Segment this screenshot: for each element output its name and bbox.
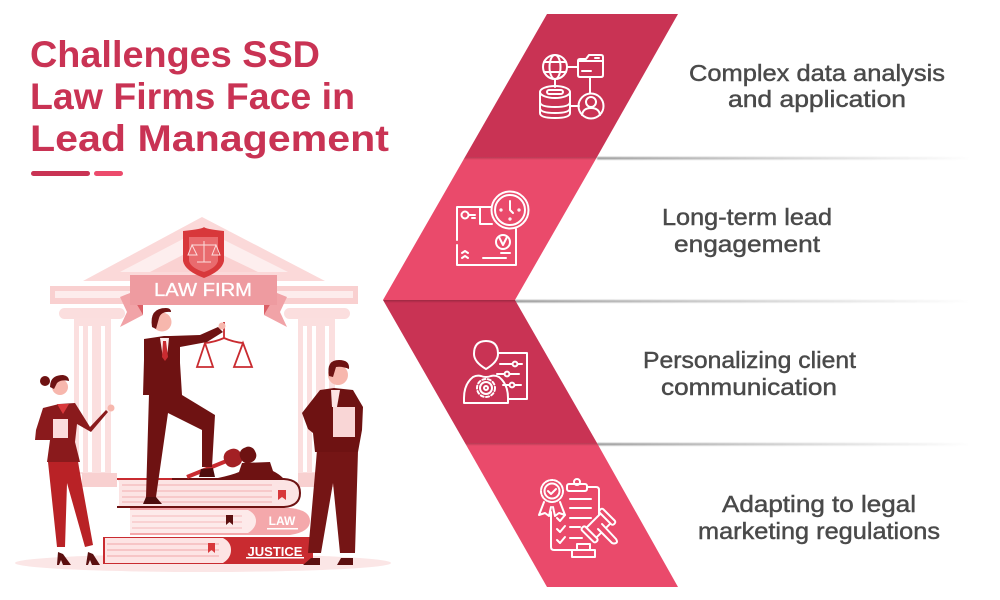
item text: personalizing client communication — [643, 347, 857, 400]
hand — [218, 322, 226, 330]
row shadow lines — [515, 157, 972, 446]
item text: personalizing client communication: Personalizing client — [643, 347, 857, 373]
person: woman with tablet — [35, 375, 114, 565]
icon: person with settings — [464, 341, 527, 403]
item text: personalizing client communication: communication — [661, 374, 837, 400]
jacket — [143, 327, 223, 395]
title: Challenges SSD — [30, 34, 320, 75]
title: Law Firms Face in — [30, 76, 355, 117]
chevron — [383, 14, 678, 587]
legs — [146, 394, 215, 497]
books: JUSTICE — [248, 544, 303, 559]
title — [30, 34, 389, 159]
person: lawyer with scales — [143, 308, 252, 504]
banner — [120, 275, 287, 327]
banner: LAW FIRM — [154, 280, 252, 300]
shield — [183, 227, 224, 278]
item text: long-term lead engagement: engagement — [674, 231, 821, 257]
item text: complex data analysis: and application — [728, 86, 906, 112]
head — [152, 312, 172, 332]
building — [50, 217, 358, 487]
scales — [197, 322, 252, 367]
segment 1 — [465, 14, 678, 157]
item text: long-term lead engagement — [662, 204, 832, 257]
item text: adapting to legal marketing regulations — [698, 491, 940, 544]
title: Lead Management — [30, 118, 389, 159]
item text: adapting to legal marketing regulations: Adapting to legal — [722, 491, 916, 517]
title underline — [31, 171, 123, 176]
item text: complex data analysis — [689, 60, 945, 112]
segment folds — [383, 157, 599, 446]
item text: complex data analysis: Complex data analysis — [689, 60, 945, 86]
person: lawyer with folder — [302, 360, 363, 565]
segment 3 — [383, 300, 597, 443]
segment 2 — [383, 157, 597, 300]
books — [103, 479, 313, 564]
gavel — [187, 444, 283, 478]
item text: long-term lead engagement: Long-term lead — [662, 204, 832, 230]
books: LAW — [269, 514, 296, 528]
segment 4 — [465, 443, 678, 587]
icon: checklist with medal and gavel — [539, 479, 617, 557]
icon: box and clock — [457, 192, 528, 265]
illustration: law firm — [15, 217, 391, 572]
item text: adapting to legal marketing regulations: marketing regulations — [698, 518, 940, 544]
ground — [15, 554, 391, 572]
icon: data network — [540, 55, 604, 118]
